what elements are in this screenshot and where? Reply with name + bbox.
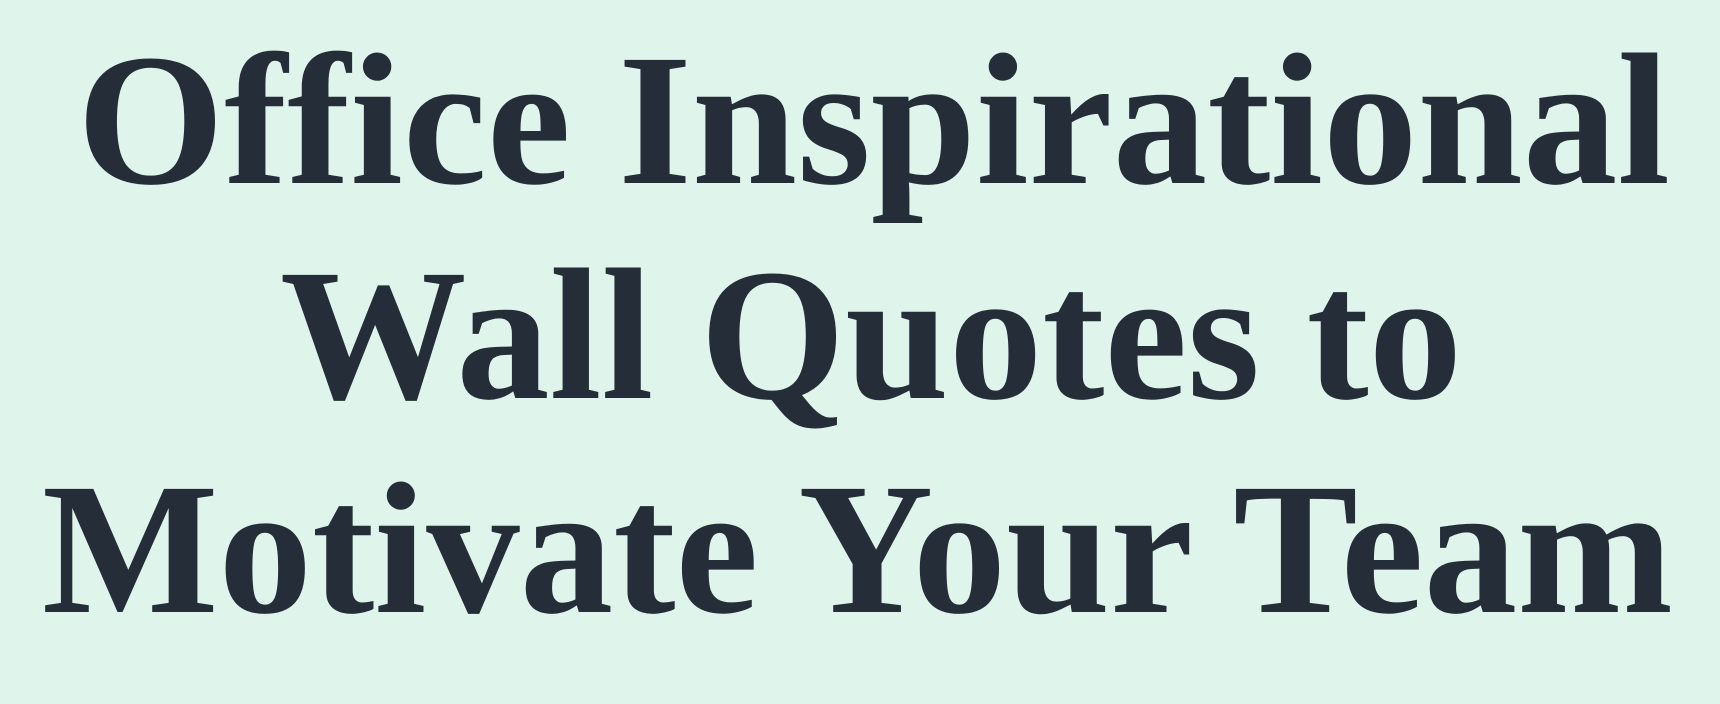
title line 2: Wall Quotes to: [280, 230, 1462, 439]
title line 3: Motivate Your Team: [42, 444, 1673, 653]
title line 1: Office Inspirational: [77, 15, 1670, 224]
